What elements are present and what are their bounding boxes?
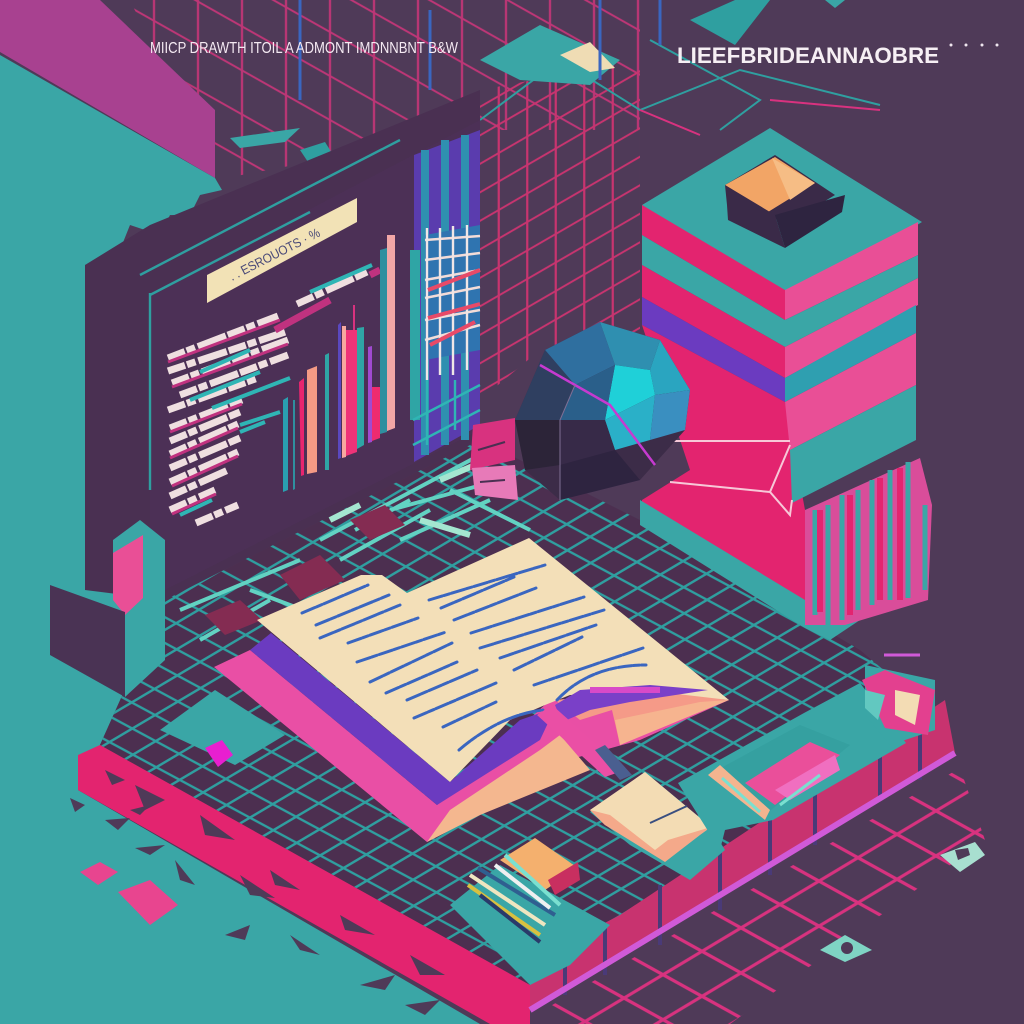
panel: lower pink wall and rail xyxy=(530,700,955,1010)
book pages xyxy=(257,538,729,782)
panel: lower pink grid xyxy=(535,768,985,1024)
icon: left blocks xyxy=(50,520,165,697)
panel: upper wireframe grid xyxy=(130,0,880,400)
illustration: mosaic cube xyxy=(862,655,935,745)
panel: screen xyxy=(140,120,480,590)
panel: wall behind screen xyxy=(85,90,480,600)
illustration: small closed book xyxy=(590,772,725,880)
title: left header: MIICP DRAWTH ITOIL A ADMONT IMDNNBNT B&W xyxy=(150,40,459,57)
title: right header: LIEEFBRIDEANNAOBRE xyxy=(677,43,939,68)
illustration: teal device slab xyxy=(678,683,906,850)
book ribbon xyxy=(537,705,625,777)
panel: platform xyxy=(100,440,945,985)
illustration: paper stack xyxy=(450,838,610,985)
icon: pale tile bottom xyxy=(820,935,872,962)
text rows xyxy=(168,265,380,523)
book text lines xyxy=(302,565,646,750)
connector lines xyxy=(640,441,792,515)
book cover xyxy=(214,650,729,842)
note label: . . ESROUOTS · % xyxy=(227,225,323,284)
icon: faceted sphere xyxy=(515,322,690,500)
teal inset xyxy=(160,690,285,767)
roof hatch xyxy=(725,155,845,248)
panel: building xyxy=(640,128,932,640)
icon: pale tile right xyxy=(940,842,985,872)
panel: floor debris xyxy=(70,798,440,1015)
dots xyxy=(950,44,998,46)
panel: platform pink edge xyxy=(78,745,530,1024)
icon: pink note stack xyxy=(470,418,518,500)
skirt stripes xyxy=(805,458,932,625)
panel: magenta corner xyxy=(0,0,215,178)
note label xyxy=(207,198,357,303)
panel: lattice xyxy=(413,130,480,462)
bar chart xyxy=(283,235,395,492)
illustration: open book xyxy=(214,538,729,842)
panel: teal floor xyxy=(0,55,480,1024)
light circuit scraps xyxy=(180,455,530,640)
